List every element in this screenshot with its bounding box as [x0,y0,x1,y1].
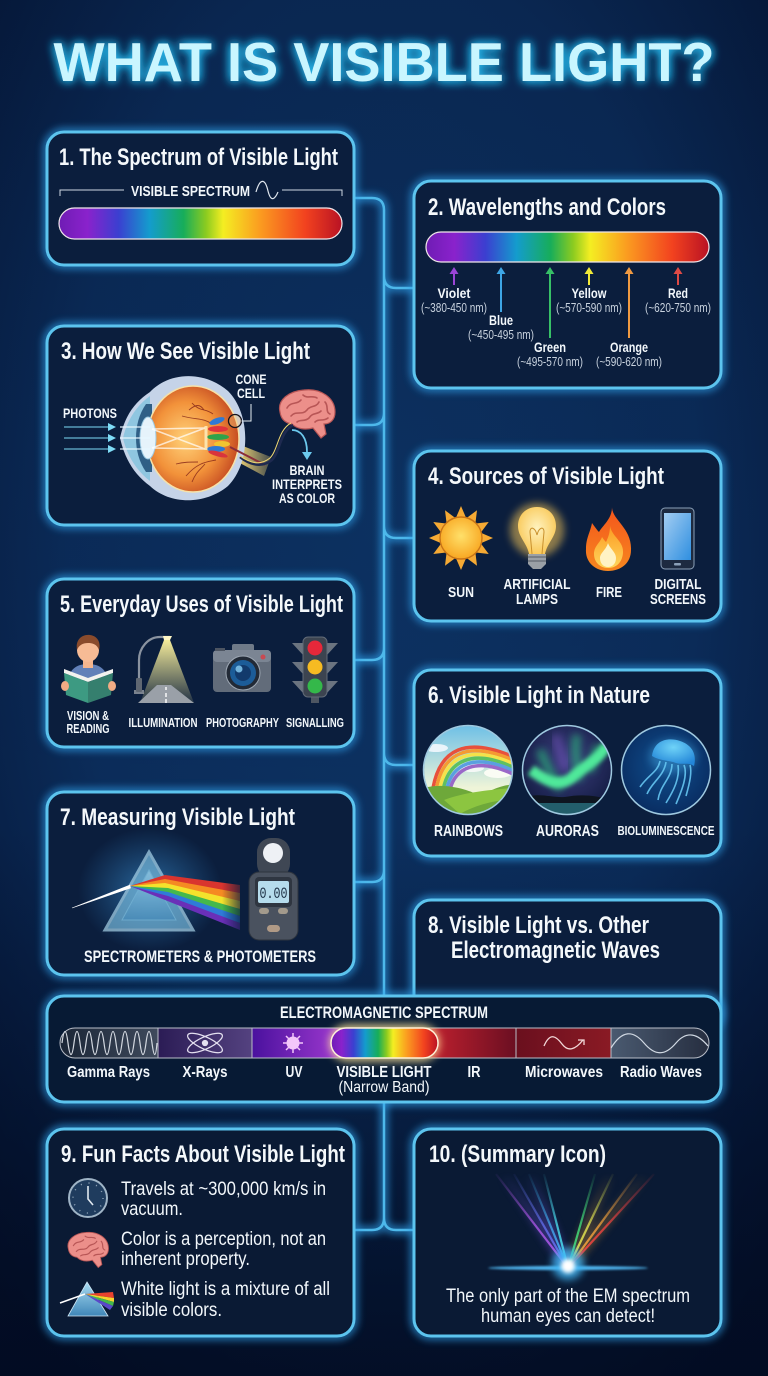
green marker [517,267,583,369]
radio wave [611,1034,708,1053]
source labels: SCREENS [650,592,706,608]
heading 10: 10. (Summary Icon) [429,1141,606,1168]
heading 4: 4. Sources of Visible Light [428,463,664,490]
orange marker: Orange [610,339,648,355]
icon: phone [661,508,694,569]
panel: 7 measuring visible light [47,792,354,975]
red marker: (~620-750 nm) [645,301,711,315]
icon: brain small [68,1232,108,1268]
em labels: (Narrow Band) [338,1079,430,1096]
fact 1: vacuum. [121,1199,183,1220]
panel: 5 everyday uses [47,579,354,747]
heading 2: 2. Wavelengths and Colors [428,194,666,221]
gamma wave [62,1032,157,1054]
icon: camera [213,644,271,692]
panel: 10 summary icon [414,1129,721,1336]
icon: prism small [60,1282,114,1316]
cone cell callout: CELL [237,385,265,401]
fact 1 [121,1179,326,1220]
icon: jellyfish circle [622,726,710,814]
summary text: The only part of the EM spectrum [446,1285,690,1307]
brain interprets label: BRAIN [290,462,324,478]
wavelength bar [426,232,709,262]
heading 8: Electromagnetic Waves [451,937,660,964]
diagram: eye [120,376,271,500]
x-ray atom [185,1030,225,1056]
visible segment with glow [329,1024,440,1062]
connector lines [354,198,414,1230]
green marker: Green [534,339,566,355]
nature labels [434,823,714,840]
heading 1: 1. The Spectrum of Visible Light [59,144,338,171]
title: WHAT IS VISIBLE LIGHT? [54,31,714,93]
em labels: Microwaves [525,1064,603,1081]
heading 7: 7. Measuring Visible Light [60,804,295,831]
heading 3: 3. How We See Visible Light [61,338,310,365]
nature labels: RAINBOWS [434,823,503,840]
photons label: PHOTONS [63,405,117,421]
icon: lamp [510,503,564,569]
brain interprets label: AS COLOR [279,490,335,506]
icon: light fan [488,1174,654,1280]
source labels: LAMPS [516,592,558,608]
yellow marker [556,267,622,315]
em bar [60,1024,709,1062]
icon: photometer: 0.00 [260,885,288,903]
photon arrows [64,423,116,453]
icon: photometer [249,838,298,940]
use labels: ILLUMINATION [128,716,198,730]
use labels: VISION & [67,709,109,723]
fact 2 [121,1229,326,1270]
icon: brain [280,390,335,438]
panel: 6 visible light in nature [414,670,721,856]
uv sun [283,1033,303,1053]
microwave squiggle [544,1037,584,1049]
diagram: prism dispersion [72,828,240,952]
em labels: VISIBLE LIGHT [336,1064,432,1081]
fact 2: inherent property. [121,1249,250,1270]
fact 1: Travels at ~300,000 km/s in [121,1179,326,1200]
blue marker [468,267,534,342]
em labels: Gamma Rays [67,1064,150,1081]
fact 2: Color is a perception, not an [121,1229,326,1250]
icon: fire [586,507,631,571]
red marker [645,267,711,315]
use labels [66,709,344,736]
use labels: PHOTOGRAPHY [206,716,279,730]
signal path to brain arrow [240,423,312,465]
brain interprets label: INTERPRETS [272,476,342,492]
summary text: human eyes can detect! [481,1305,655,1327]
violet marker [421,267,487,315]
icon: rainbow circle [424,726,516,814]
orange marker: (~590-620 nm) [596,355,662,369]
em labels: IR [468,1064,481,1081]
use labels: READING [66,722,110,736]
blue marker: Blue [489,312,513,328]
yellow marker: Yellow [572,285,607,301]
panel: 1 the spectrum of visible light [47,132,354,265]
em labels: Radio Waves [620,1064,702,1081]
panel: 3 how we see visible light [47,326,354,525]
measure label: SPECTROMETERS & PHOTOMETERS [84,948,316,966]
orange marker [596,267,662,369]
heading 8 [428,912,660,964]
nature labels: BIOLUMINESCENCE [618,824,714,838]
icon: sun [429,506,493,570]
panel: 4 sources of visible light [414,451,721,621]
fact 3: White light is a mixture of all [121,1279,330,1300]
visible spectrum bracket label: VISIBLE SPECTRUM [131,183,250,200]
icon: person reading [61,635,116,703]
fact 3: visible colors. [121,1300,222,1321]
use labels: SIGNALLING [286,716,344,730]
source labels [448,577,706,608]
violet marker: Violet [438,285,471,301]
brain interprets label [272,462,342,506]
heading 9: 9. Fun Facts About Visible Light [61,1141,345,1168]
icon: aurora circle [522,726,612,814]
em labels: UV [286,1064,303,1081]
visible spectrum bracket label [60,181,342,200]
panel: 2 wavelengths and colors [414,181,721,388]
source labels: FIRE [596,585,622,601]
summary text [446,1285,690,1327]
nature labels: AURORAS [536,823,599,840]
panel: 9 fun facts [47,1129,354,1336]
red marker: Red [668,285,688,301]
icon: street lamp [134,636,194,703]
heading 5: 5. Everyday Uses of Visible Light [60,591,343,618]
spectrum bar [59,208,342,239]
source labels: SUN [448,585,474,601]
violet marker: (~380-450 nm) [421,301,487,315]
panel: electromagnetic spectrum band [47,996,721,1102]
yellow marker: (~570-590 nm) [556,301,622,315]
heading 6: 6. Visible Light in Nature [428,682,650,709]
panel: 8 visible light vs other waves [414,900,721,1030]
source labels: ARTIFICIAL [504,577,571,593]
blue marker: (~450-495 nm) [468,328,534,342]
icon: traffic light [292,637,338,703]
cone cell callout [228,371,266,428]
em heading: ELECTROMAGNETIC SPECTRUM [280,1003,488,1022]
cone cell callout: CONE [236,371,266,387]
em labels: X-Rays [182,1064,228,1081]
em labels [67,1064,702,1096]
fact 3 [121,1279,330,1321]
green marker: (~495-570 nm) [517,355,583,369]
icon: clock [69,1179,107,1217]
heading 8: 8. Visible Light vs. Other [428,912,649,939]
source labels: DIGITAL [654,577,702,593]
